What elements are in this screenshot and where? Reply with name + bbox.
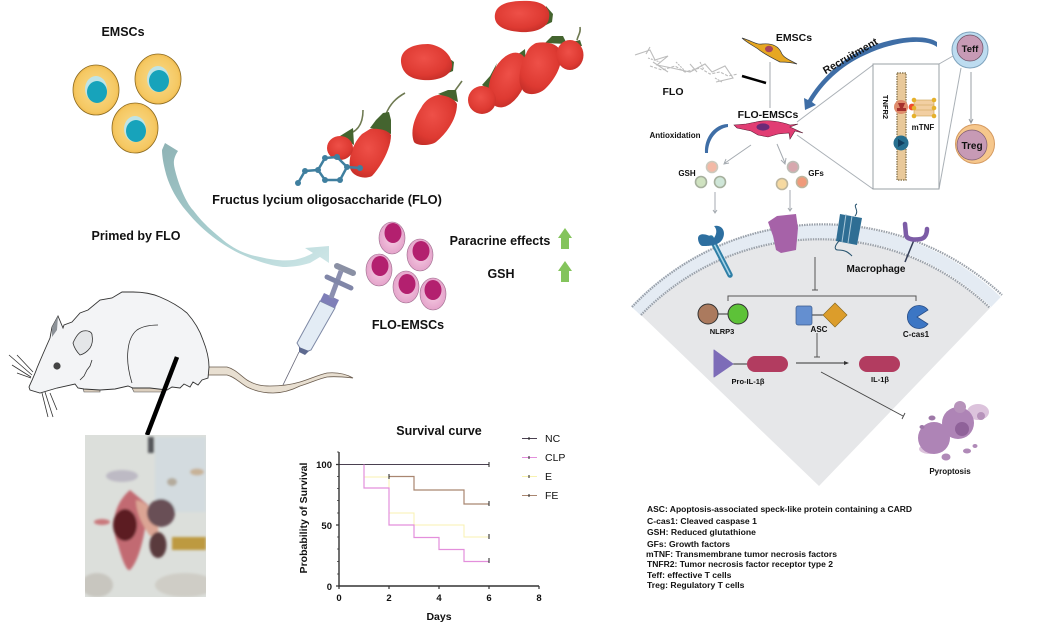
icon: ASC [796, 303, 847, 334]
label: GSH: GSH [487, 267, 515, 281]
icon: EMSC cells [73, 54, 181, 153]
inhibition: pyroptosis [821, 372, 905, 419]
icon: up arrow paracrine [558, 228, 572, 249]
chart title: Survival curve [396, 424, 482, 438]
axis titles: Days [426, 611, 452, 623]
legend: abbreviations: GFs: Growth factors [647, 539, 730, 549]
legend: E [545, 471, 552, 483]
icon: ASC: ASC [811, 325, 828, 334]
icon: GSH vesicles [696, 162, 726, 188]
axis tick labels: 100 [316, 460, 332, 471]
rat tail [207, 367, 353, 393]
axes [336, 452, 539, 589]
legend: abbreviations: TNFR2: Tumor necrosis factor receptor type 2 [647, 559, 833, 569]
icon: Pro-IL-1β: Pro-IL-1β [732, 377, 765, 386]
legend: abbreviations: mTNF: Transmembrane tumor necrosis factors [646, 549, 837, 559]
connector: rat to photo [147, 357, 177, 435]
legend: abbreviations: Treg: Regulatory T cells [647, 580, 745, 590]
icon: Treg cell [956, 124, 994, 164]
icon: C-cas1: C-cas1 [903, 330, 930, 339]
arrow: priming curve [162, 143, 329, 267]
label: Primed by FLO: Primed by FLO [92, 229, 181, 243]
arrow: cleavage [796, 362, 846, 364]
legend [522, 433, 565, 502]
icon: goji berries [327, 1, 584, 178]
berry fruit [327, 1, 584, 178]
icon: syringe [283, 266, 353, 385]
icon: C-cas1 [903, 306, 930, 339]
inhibition: top [812, 257, 818, 290]
axis tick labels [316, 460, 542, 604]
legend: CLP [545, 452, 565, 464]
arrow: to GSH [724, 145, 751, 164]
icon: Treg cell: Treg [961, 141, 983, 152]
icon: IL-1β [859, 356, 900, 384]
chart: survival curve: Probability of Survival [298, 462, 310, 573]
legend: abbreviations: ASC: Apoptosis-associated speck-like protein containing a CARD [647, 504, 912, 514]
axis tick labels: 0 [327, 582, 332, 593]
icon: blue receptor [698, 226, 730, 275]
icon: Pro-IL-1β [714, 350, 788, 386]
label: Antioxidation: Antioxidation [649, 131, 701, 140]
label: Pyroptosis: Pyroptosis [929, 467, 971, 476]
axis tick labels: 8 [536, 593, 542, 604]
arrow: GSH down [713, 192, 717, 213]
connector: FLO bar [742, 76, 766, 83]
zoom lines [797, 56, 961, 189]
heading: EMSCs: EMSCs [101, 25, 145, 39]
icon: IL-1β: IL-1β [871, 375, 889, 384]
axis tick labels: 6 [486, 593, 492, 604]
axis tick labels: 0 [336, 593, 342, 604]
legend: NC [545, 433, 561, 445]
rat details [9, 325, 158, 417]
icon: NLRP3: NLRP3 [710, 327, 734, 336]
legend: FE [545, 490, 558, 502]
legend: abbreviations: C-cas1: Cleaved caspase 1 [647, 516, 757, 526]
label: Paracrine effects: Paracrine effects [450, 234, 550, 248]
icon: FLO-EMSC cell [734, 121, 803, 139]
axis tick labels: 2 [386, 593, 392, 604]
caps [340, 6, 582, 145]
label: Recruitment: Recruitment [821, 36, 880, 77]
panel: TNFR2 inset: mTNF [912, 123, 934, 132]
panel: macrophage fan [632, 224, 1002, 486]
icon: purple Y receptor [905, 224, 927, 262]
chart: survival curve [298, 424, 565, 623]
arrow: Antioxidation [705, 124, 728, 153]
arrowhead [844, 361, 849, 365]
rat feet [83, 388, 165, 392]
label: Macrophage: Macrophage [847, 264, 906, 275]
icon: rat [9, 292, 353, 417]
icon: EMSC spindle cell [742, 38, 797, 64]
arrow: Teff to Treg [969, 72, 973, 123]
label: FLO-EMSCs: FLO-EMSCs [372, 318, 444, 332]
arrow: to GFs [777, 144, 786, 164]
icon: NLRP3 [698, 304, 748, 336]
photo: surgery [81, 435, 215, 597]
icon: blue GPCR [835, 204, 862, 256]
arrow: Recruitment [804, 37, 937, 110]
icon: FLO-EMSC cells [366, 222, 446, 310]
rat body [29, 292, 209, 393]
icon: pyroptotic cell [918, 401, 989, 460]
label: FLO: FLO [662, 86, 684, 98]
bracket [728, 296, 916, 301]
label: FLO-EMSCs right: FLO-EMSCs [738, 109, 798, 121]
legend: abbreviations: GSH: Reduced glutathione [647, 527, 756, 537]
icon: GF vesicles [776, 162, 808, 190]
icon: Teff cell: Teff [962, 44, 979, 55]
rat eye [53, 362, 61, 370]
series lines [339, 462, 489, 563]
label: GFs: GFs [808, 169, 824, 178]
arrow: GFs down [788, 190, 792, 211]
icon: FLO structure [635, 47, 738, 82]
legend: abbreviations [646, 504, 912, 590]
panel: TNFR2 inset: TNFR2 [881, 95, 890, 119]
legend: abbreviations: Teff: effective T cells [647, 570, 732, 580]
panel: TNFR2 inset [873, 64, 939, 189]
axis tick labels: 4 [436, 593, 442, 604]
axis tick labels: 50 [321, 521, 332, 532]
icon: molecule [295, 154, 363, 186]
icon: up arrow GSH [558, 261, 572, 282]
label: EMSCs right: EMSCs [776, 32, 812, 44]
label: FLO full name: Fructus lycium oligosaccharide (FLO) [212, 192, 442, 207]
icon: Teff cell [952, 32, 988, 68]
inhibition: ASC [814, 333, 820, 357]
stems [353, 27, 580, 132]
rat far ear shade [52, 316, 58, 337]
label: GSH right: GSH [678, 169, 696, 178]
icon: purple channel [768, 214, 798, 253]
connector: EMSC to FLO-EMSC [769, 62, 771, 108]
